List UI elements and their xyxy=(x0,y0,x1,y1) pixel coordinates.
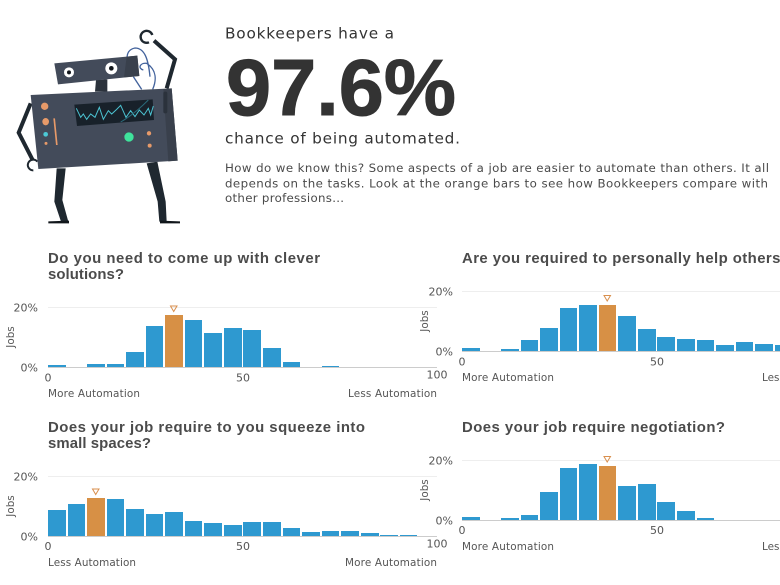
histogram bars xyxy=(48,498,417,536)
y axis labels: Jobs xyxy=(5,326,17,349)
y axis labels xyxy=(419,454,453,528)
y axis labels: 20% xyxy=(14,470,38,484)
y axis labels: Jobs xyxy=(5,495,17,518)
heading: Do you need to come up with clever xyxy=(48,251,320,267)
y axis labels: 20% xyxy=(14,302,38,314)
histogram bars xyxy=(462,305,780,351)
x axis labels xyxy=(44,538,448,569)
icon: robot illustration xyxy=(19,31,180,223)
y axis labels xyxy=(5,470,38,544)
marker: bookkeepers xyxy=(92,489,99,494)
heading xyxy=(48,251,320,283)
y axis labels: 0% xyxy=(21,362,38,374)
x axis labels: 100 xyxy=(426,538,448,550)
x axis labels: 50 xyxy=(236,372,250,384)
marker: bookkeepers xyxy=(170,306,177,312)
x axis labels: More Automation xyxy=(345,557,437,569)
x axis labels xyxy=(458,524,780,553)
heading xyxy=(48,420,365,452)
intro paragraph: other professions... xyxy=(225,191,344,205)
panel: clever solutions chart xyxy=(5,251,448,400)
y axis labels xyxy=(419,286,453,358)
x axis labels: 0 xyxy=(458,356,466,368)
heading: solutions? xyxy=(48,267,124,283)
panel: negotiation chart xyxy=(419,420,780,553)
y axis labels: 0% xyxy=(21,530,38,544)
intro heading: Bookkeepers have a xyxy=(225,24,394,42)
heading: Does your job require to you squeeze into xyxy=(48,420,365,436)
intro paragraph: How do we know this? Some aspects of a job are easier to automate than others. It all xyxy=(225,161,769,175)
marker: bookkeepers xyxy=(604,456,610,462)
marker: bookkeepers xyxy=(604,296,610,301)
y axis labels: Jobs xyxy=(419,479,431,502)
histogram bars xyxy=(48,315,339,367)
panel: personally help others chart xyxy=(419,251,780,384)
x axis labels: 0 xyxy=(458,524,466,537)
x axis labels: 0 xyxy=(44,540,52,553)
headline stat: 97.6% xyxy=(226,43,456,132)
stat caption: chance of being automated. xyxy=(225,130,460,148)
y axis labels: 0% xyxy=(436,514,453,528)
x axis labels: More Automation xyxy=(48,388,140,400)
heading: Does your job require negotiation? xyxy=(462,420,725,436)
x axis labels: More Automation xyxy=(462,372,554,384)
x axis labels: More Automation xyxy=(462,541,554,553)
x axis labels: 50 xyxy=(650,524,664,537)
y axis labels: 20% xyxy=(429,454,453,468)
x axis labels xyxy=(44,368,448,400)
y axis labels: Jobs xyxy=(419,310,431,333)
panel: small spaces chart xyxy=(5,420,448,569)
y axis labels: 0% xyxy=(436,346,453,358)
intro paragraph xyxy=(225,161,769,205)
x axis labels: Less Automation xyxy=(48,557,136,569)
y axis labels: 20% xyxy=(429,286,453,298)
histogram bars xyxy=(462,464,714,520)
x axis labels: 50 xyxy=(650,356,664,368)
x axis labels: 50 xyxy=(236,540,250,553)
x axis labels xyxy=(458,356,780,384)
heading: small spaces? xyxy=(48,436,151,452)
x axis labels: 0 xyxy=(44,372,52,384)
x axis labels: 100 xyxy=(426,368,448,382)
intro paragraph: depends on the tasks. Look at the orange bars to see how Bookkeepers compare with xyxy=(225,176,768,190)
y axis labels xyxy=(5,302,38,374)
x axis labels: Less Automation xyxy=(348,388,437,400)
